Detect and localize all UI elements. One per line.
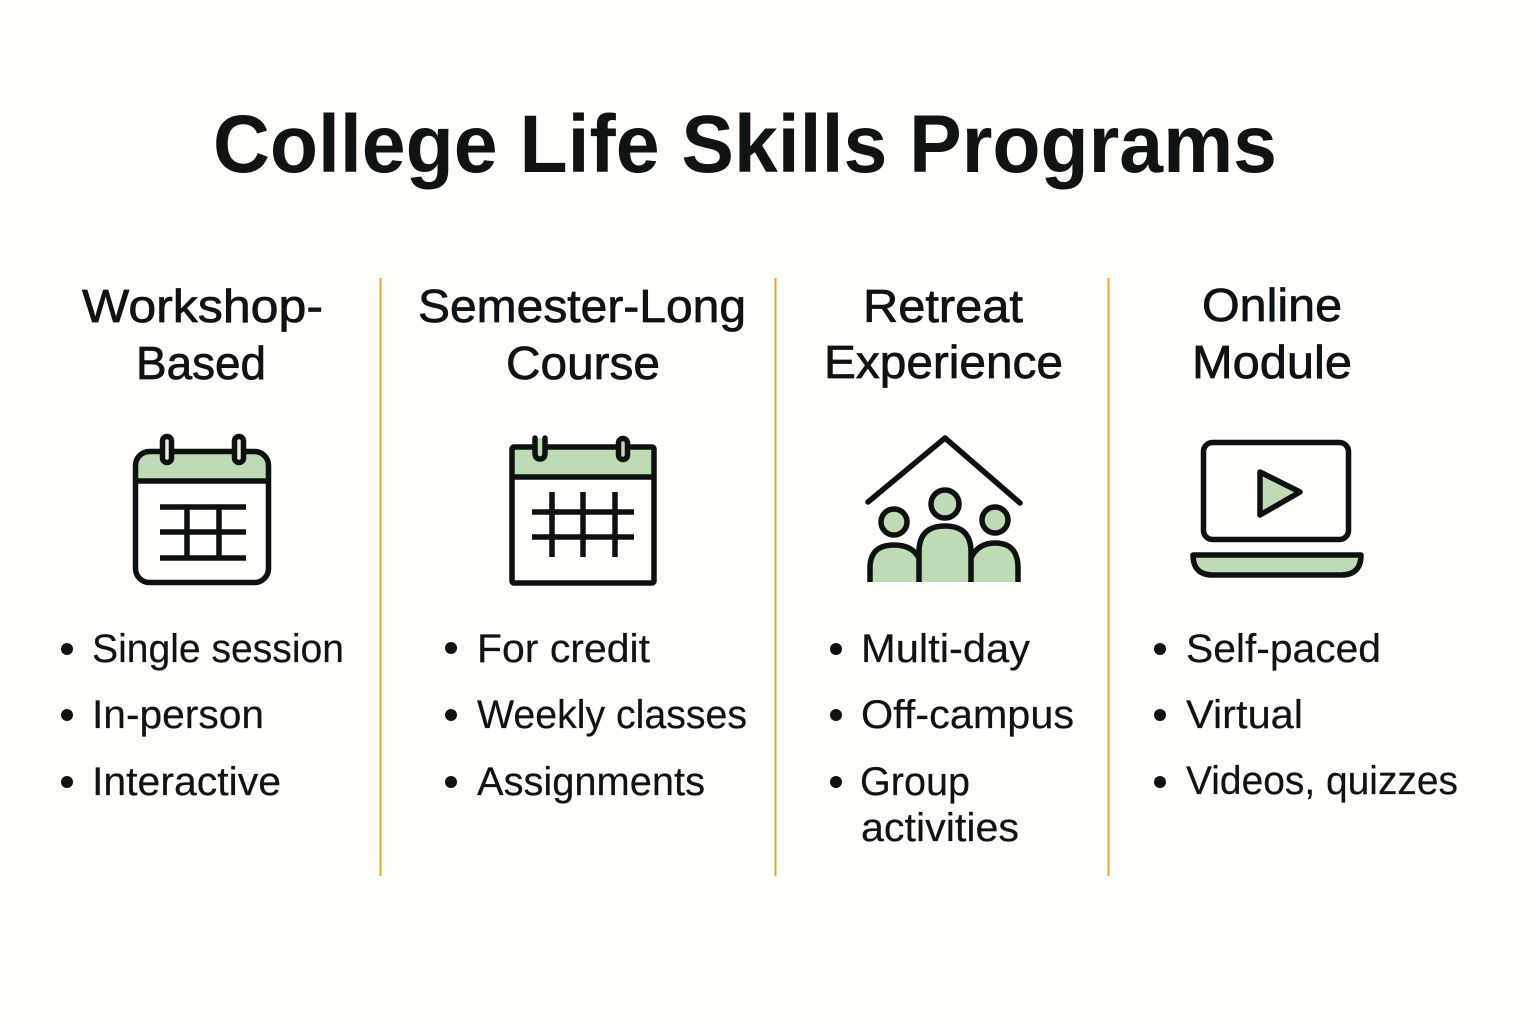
panel: workshop-based xyxy=(61,280,344,804)
list: retreat features: activities xyxy=(861,806,1019,850)
list: retreat features: Off-campus xyxy=(861,693,1074,737)
list: workshop-based features: Interactive xyxy=(92,760,281,804)
list: online features: Videos, quizzes xyxy=(1186,759,1458,803)
heading: semester-long course xyxy=(418,280,746,389)
icon: laptop with play button xyxy=(1193,442,1361,575)
heading: semester-long course: Semester-Long xyxy=(418,280,746,332)
heading: workshop-based xyxy=(82,280,323,389)
icon: group under roof xyxy=(868,438,1020,582)
list: workshop-based features: Single session xyxy=(92,627,344,671)
list: retreat features: Group xyxy=(860,760,970,804)
list: semester-long features: Assignments xyxy=(477,760,705,804)
icon: rounded calendar xyxy=(135,436,269,582)
heading: workshop-based: Based xyxy=(136,337,266,389)
heading: online module: Module xyxy=(1192,336,1352,388)
icon: square calendar xyxy=(512,438,654,583)
panel: semester-long course xyxy=(418,280,747,804)
list: semester-long features xyxy=(445,627,747,804)
list: workshop-based features: In-person xyxy=(92,693,264,737)
heading: retreat experience: Retreat xyxy=(863,280,1023,332)
heading: workshop-based: Workshop- xyxy=(82,280,323,332)
list: workshop-based features xyxy=(61,627,344,804)
heading: semester-long course: Course xyxy=(506,337,660,389)
heading: online module xyxy=(1192,279,1352,388)
list: online features xyxy=(1154,627,1458,803)
heading: online module: Online xyxy=(1202,279,1342,331)
list: retreat features: Multi-day xyxy=(861,627,1030,671)
heading: retreat experience: Experience xyxy=(824,336,1063,388)
panel: online module xyxy=(1154,279,1458,803)
panel: retreat experience xyxy=(824,280,1074,850)
heading: retreat experience xyxy=(824,280,1063,388)
list: online features: Self-paced xyxy=(1186,627,1381,671)
list: semester-long features: Weekly classes xyxy=(477,693,747,737)
list: online features: Virtual xyxy=(1186,693,1303,737)
list: semester-long features: For credit xyxy=(477,627,650,671)
title: College Life Skills Programs xyxy=(213,99,1277,190)
list: retreat features xyxy=(830,627,1074,850)
